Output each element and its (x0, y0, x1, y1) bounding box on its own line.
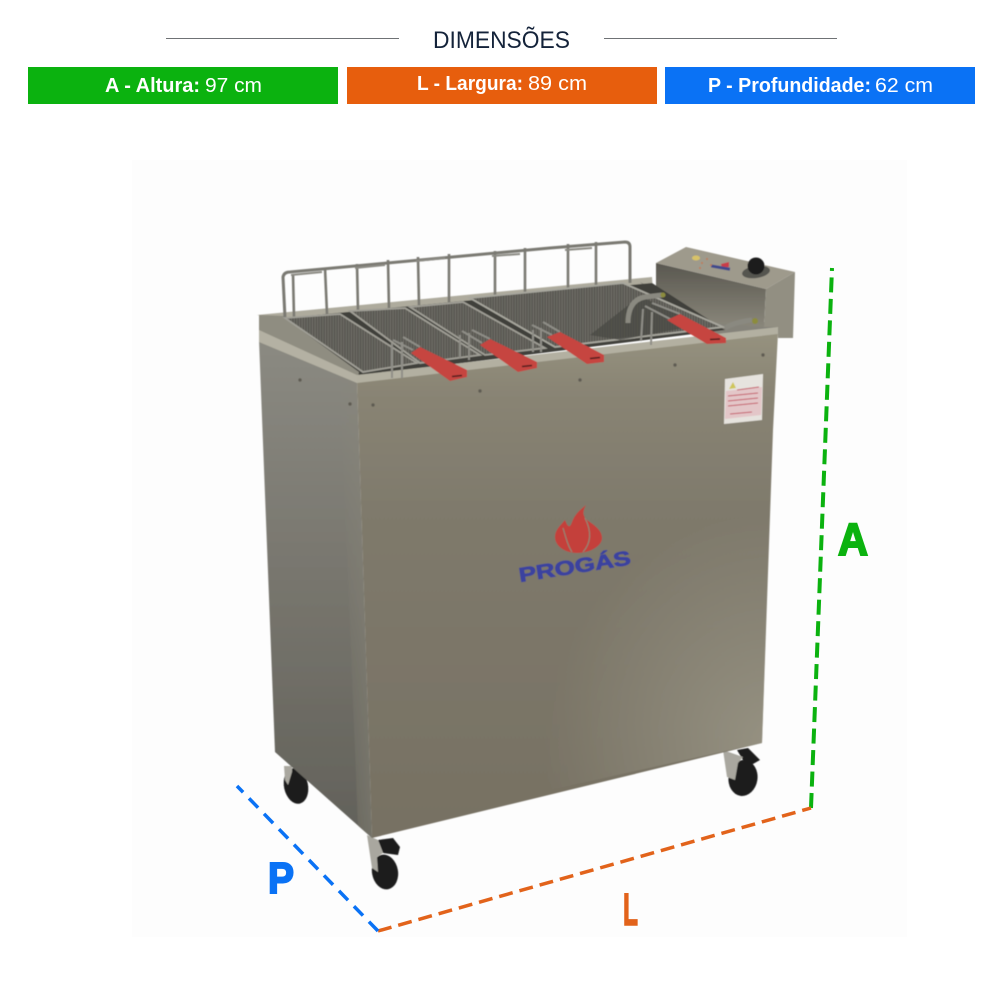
warning label (724, 374, 763, 424)
basket 2 (350, 308, 480, 363)
basket 4 (470, 283, 723, 347)
logo: Progás: PROGÁS (517, 547, 632, 587)
control box (656, 247, 795, 338)
badge: A - Altura: 97 cm (205, 75, 262, 97)
dimension line: width L (orange) (378, 808, 811, 931)
handle wires (392, 303, 680, 378)
frying basin (285, 283, 725, 376)
badge: L - Largura (347, 67, 657, 104)
badge: A - Altura: A - Altura: (105, 75, 200, 97)
red handles (411, 314, 726, 381)
dimension line: depth P (blue) (237, 786, 378, 931)
wheel: rear left (281, 766, 311, 806)
wheel: rear right (723, 748, 760, 798)
product: fryer cabinet (257, 242, 795, 891)
cabinet: front panel (357, 333, 778, 838)
badge: L - Largura: L - Largura: (417, 73, 523, 95)
cabinet: top rim (259, 315, 778, 383)
wheel: front left (367, 835, 401, 891)
rivets (298, 353, 765, 407)
basket rail (283, 242, 630, 318)
badge: P - Profundidade: 62 cm (875, 75, 933, 97)
control knob (741, 258, 771, 280)
cabinet: left side panel (259, 340, 372, 838)
badge: L - Largura: 89 cm (528, 73, 587, 95)
title: DIMENSÕES: DIMENSÕES (433, 26, 570, 54)
badge: A - Altura (28, 67, 338, 104)
label: A: A (838, 514, 868, 565)
right deck (640, 282, 778, 342)
rear plate (257, 277, 653, 320)
basket 1 (285, 314, 417, 372)
dimension line: height A (green) (811, 268, 832, 808)
basket 3 (410, 302, 545, 355)
label: L: L (623, 884, 638, 935)
badge: P - Profundidade (665, 67, 975, 104)
heating tube (628, 292, 758, 328)
label: P: P (268, 854, 294, 903)
logo: Progás (517, 505, 632, 587)
badge: P - Profundidade: P - Profundidade: (708, 75, 871, 97)
